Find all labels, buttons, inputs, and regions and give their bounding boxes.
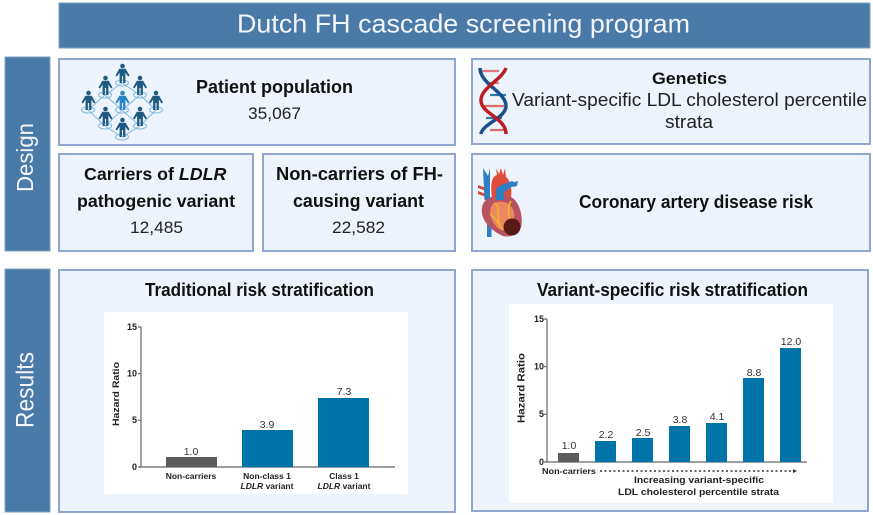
panel: carriers [59,154,253,251]
bar chart: variant-specific: 3.8 [673,414,687,426]
icon: patient network [82,64,163,140]
heading: non-carriers: Non-carriers of FH- [276,164,443,184]
bar chart: traditional: 15 [127,322,137,332]
bar chart: traditional: 5 [132,415,137,425]
bar chart: traditional: 10 [127,368,137,378]
bar chart: variant-specific: Increasing variant-specific [634,475,764,486]
section label: Results: Results [12,352,40,428]
panel: variant-specific risk stratification [472,270,868,511]
bar chart: variant-specific: 2.2 [599,429,613,441]
bar chart: variant-specific: Non-carriers [542,466,596,476]
panel: traditional risk stratification [59,270,455,512]
heading: variant-specific risk stratification: Variant-specific risk stratification [537,280,808,300]
bar chart: traditional: 7.3 [337,386,351,398]
bar chart: variant-specific: 12.0 [781,336,801,348]
bar chart: traditional: Non-class 1 [243,471,291,481]
heading: non-carriers: causing variant [293,191,424,211]
section label: Design [5,57,50,251]
icon: DNA helix [480,68,506,134]
bar chart: variant-specific: 8.8 [747,367,761,379]
heading: carriers: Carriers of [84,164,179,184]
title banner: Dutch FH cascade screening program [237,8,690,38]
heading: patient population: Patient population [196,77,353,97]
bar chart: variant-specific: 2.5 [636,427,650,439]
section label: Design: Design [12,123,38,192]
text: genetics description [512,90,867,132]
bar chart: variant-specific [509,304,833,503]
bar chart: variant-specific: 4.1 [710,411,724,423]
icon: heart [478,168,522,237]
bar chart: traditional: LDLR variant [318,481,371,491]
count: carriers: 12,485 [130,218,183,237]
panel: patient population [59,59,455,145]
bar chart: traditional: LDLR variant [241,481,294,491]
bar chart: variant-specific: 0 [539,457,544,467]
bar chart: variant-specific: 15 [534,314,544,324]
bar chart: variant-specific: 10 [534,362,544,372]
bar chart: variant-specific: 1.0 [562,440,576,452]
bar chart: traditional: Non-carriers [166,471,217,481]
text: genetics description: Variant-specific LDL cholesterol percentile [512,90,867,110]
heading: non-carriers [276,164,443,211]
bar chart: traditional: Class 1 [329,471,359,481]
bar chart: traditional: Hazard Ratio [111,362,122,426]
bar chart: traditional: 1.0 [184,446,198,458]
text: genetics description: strata [665,112,714,132]
bar chart: traditional: 0 [132,462,137,472]
panel: genetics [472,59,870,144]
heading: carriers: LDLR [179,164,226,184]
bar chart: variant-specific: 5 [539,409,544,419]
heading: traditional risk stratification: Traditional risk stratification [145,280,374,300]
bar chart: variant-specific: Hazard Ratio [516,353,528,423]
panel: non-carriers [263,154,455,251]
title banner [59,3,870,48]
bar chart: traditional [104,312,408,494]
bar chart: variant-specific: LDL cholesterol percentile strata [618,487,780,498]
panel: coronary artery disease risk [472,154,870,251]
heading: genetics: Genetics [652,69,727,88]
count: patient population: 35,067 [248,104,301,123]
heading: carriers: pathogenic variant [77,191,235,211]
heading: coronary artery disease risk: Coronary artery disease risk [579,192,814,212]
bar chart: traditional: 3.9 [260,419,274,431]
section label: Results [5,269,50,512]
count: non-carriers: 22,582 [332,218,385,237]
